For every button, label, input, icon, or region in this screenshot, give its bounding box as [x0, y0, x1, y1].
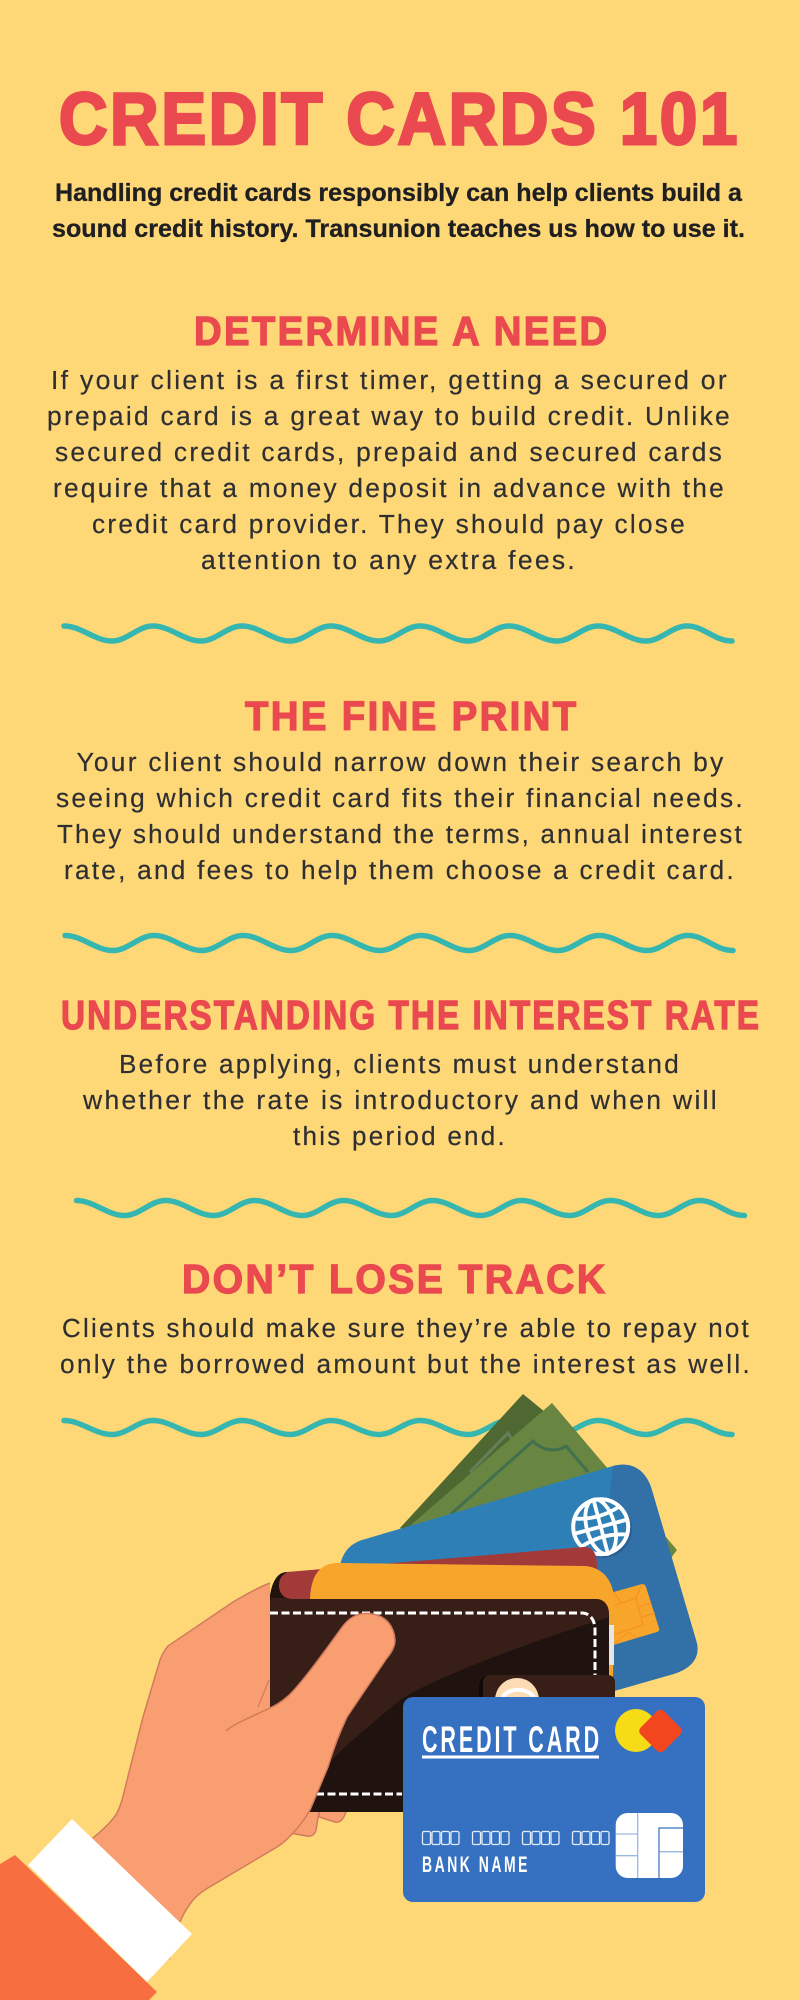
icon: card chip [616, 1813, 683, 1878]
icon: globe [567, 1493, 634, 1561]
card title [422, 1719, 602, 1760]
icon: chip [610, 1584, 659, 1646]
text block: don't lose track: only the borrowed amount but the interest as well. [60, 1351, 752, 1379]
card number placeholders [422, 1832, 609, 1844]
bank name: BANK NAME [422, 1852, 530, 1877]
illustration: hand holding wallet with cards [0, 1394, 705, 2000]
credit card front [403, 1697, 705, 1902]
icon: blue bank card [339, 1465, 698, 1700]
heading: determine a need: DETERMINE A NEED [194, 308, 610, 354]
icon: silver tab [609, 1625, 614, 1665]
intro text [52, 179, 745, 243]
text block: the fine print [56, 749, 745, 885]
icon: hand [70, 1583, 395, 1960]
text block: don't lose track [60, 1315, 752, 1379]
icon: wallet [269, 1572, 609, 1812]
heading: don't lose track: DON’T LOSE TRACK [182, 1256, 608, 1302]
heading: the fine print: THE FINE PRINT [245, 693, 578, 739]
card title: CREDIT CARD [422, 1719, 602, 1760]
icon: red card [279, 1547, 597, 1602]
text block: understanding the interest rate: whether the rate is introductory and when will [82, 1087, 719, 1115]
fingers behind wallet [290, 1800, 346, 1836]
text block: the fine print: Your client should narrow down their search by [76, 749, 725, 777]
text block: determine a need [47, 367, 732, 575]
icon: white shirt cuff [28, 1819, 192, 1982]
text block: don't lose track: Clients should make sure they’re able to repay not [62, 1315, 751, 1343]
text block: determine a need: attention to any extra fees. [201, 547, 577, 575]
icon: orange sleeve [0, 1855, 157, 2000]
text block: determine a need: secured credit cards, prepaid and secured cards [55, 439, 724, 467]
title: CREDIT CARDS 101 [59, 79, 740, 160]
icon: wallet clasp [479, 1675, 615, 1722]
wavy divider 4 [64, 1420, 732, 1434]
text block: understanding the interest rate [82, 1051, 719, 1151]
icon: banknotes [400, 1394, 677, 1600]
icon: card network logo [615, 1708, 684, 1754]
wavy divider 2 [65, 936, 733, 950]
intro text: Handling credit cards responsibly can help clients build a [55, 179, 743, 207]
text block: determine a need: credit card provider. They should pay close [92, 511, 687, 539]
wavy divider 3 [76, 1200, 744, 1216]
wavy divider 1 [64, 626, 732, 641]
text block: understanding the interest rate: this period end. [293, 1123, 507, 1151]
text block: determine a need: prepaid card is a great way to build credit. Unlike [47, 403, 732, 431]
text block: the fine print: rate, and fees to help them choose a credit card. [64, 857, 736, 885]
text block: the fine print: They should understand the terms, annual interest [57, 821, 744, 849]
text block: determine a need: If your client is a first timer, getting a secured or [51, 367, 729, 395]
text block: the fine print: seeing which credit card fits their financial needs. [56, 785, 745, 813]
intro text: sound credit history. Transunion teaches us how to use it. [52, 215, 745, 243]
text block: determine a need: require that a money deposit in advance with the [53, 475, 726, 503]
text block: understanding the interest rate: Before applying, clients must understand [119, 1051, 681, 1079]
icon: orange card [310, 1563, 614, 1680]
